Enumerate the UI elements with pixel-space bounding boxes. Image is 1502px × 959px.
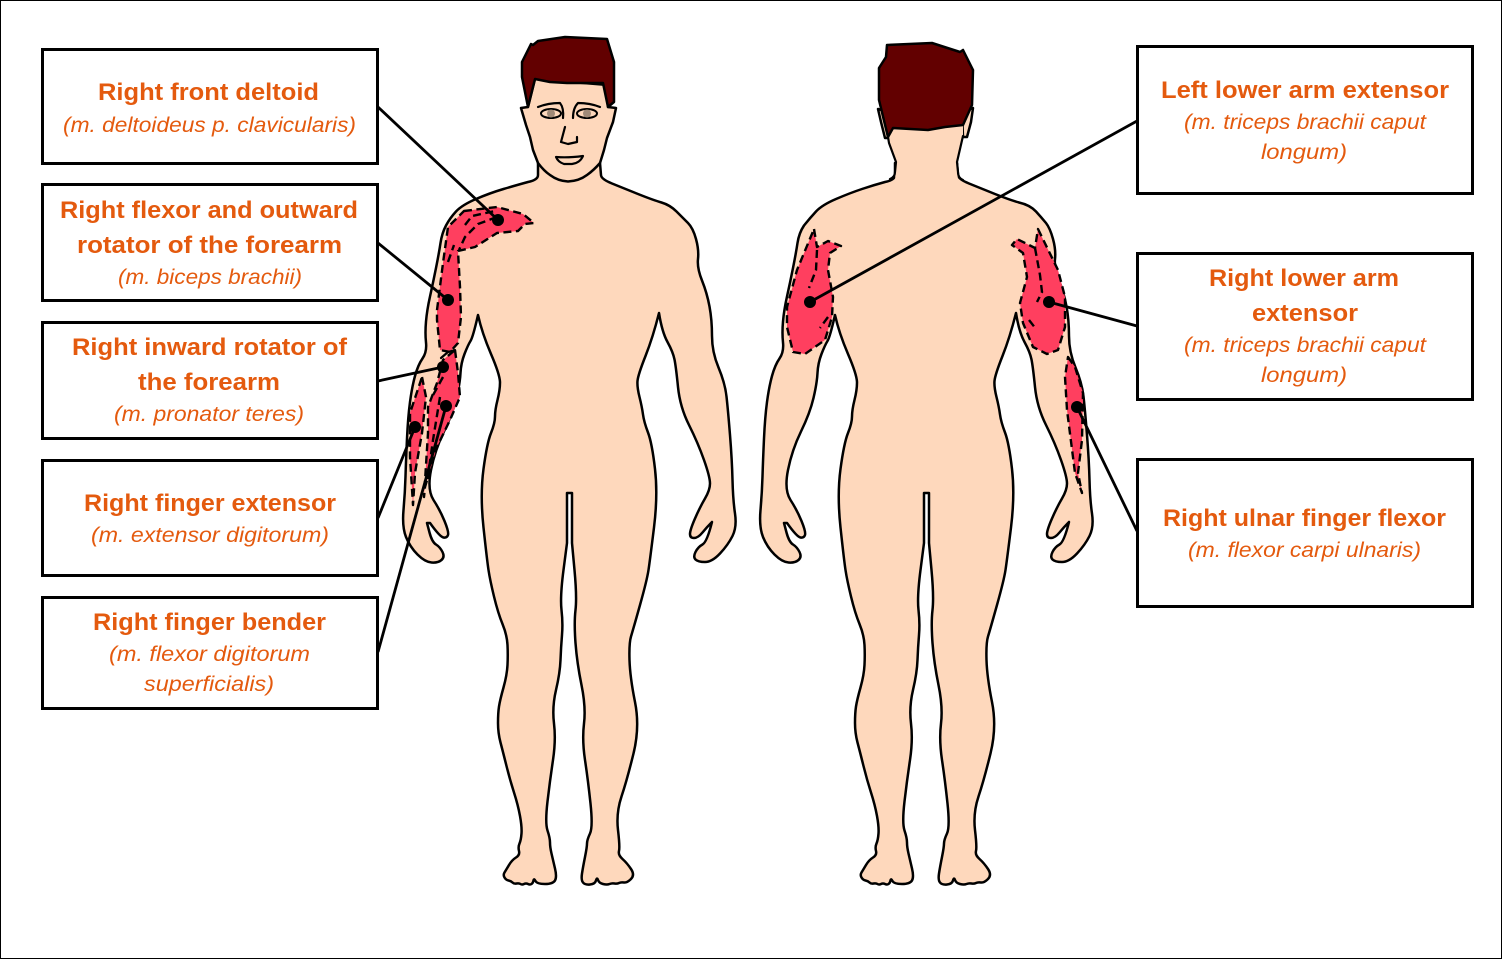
label: right ulnar finger flexor [1138,460,1472,606]
deltoid inner dashes [448,211,497,262]
leader: finger bender [378,406,446,652]
leader: biceps [378,243,448,300]
label: left lower arm extensor: Left lower arm extensor [1161,77,1449,104]
back muscle areas [787,229,1083,493]
back body figure [760,43,1093,885]
label: right finger bender: superficialis) [144,673,274,696]
label: right front deltoid [42,50,378,164]
label: right finger extensor [42,460,378,576]
label: right ulnar finger flexor: Right ulnar finger flexor [1163,505,1446,532]
back neck sides [888,136,963,180]
muscle: ulnar flexor [1065,357,1083,493]
label: right inward rotator [42,322,378,438]
label: right lower arm extensor: (m. triceps brachii caput [1184,334,1427,357]
eyes and brows [538,103,600,118]
label: right lower arm extensor [1138,254,1472,400]
label: right flexor and outward rotator: (m. biceps brachii) [118,266,302,289]
front body outline [403,163,736,885]
leader: finger extensor [378,427,415,518]
left triceps inner dashes [809,250,828,328]
label: right inward rotator: the forearm [138,369,280,396]
left ear [878,109,889,138]
face [521,79,616,182]
front muscle areas [410,207,534,505]
right ear [962,108,973,137]
label: right finger bender [42,598,378,708]
label: right finger bender: Right finger bender [93,609,326,636]
muscle: finger extensor [410,377,426,505]
leader: left triceps [810,121,1137,302]
leader lines [378,107,1137,652]
label: left lower arm extensor: (m. triceps brachii caput [1184,111,1427,134]
muscle: right triceps [1012,229,1065,354]
leader: right triceps [1049,302,1137,326]
muscle: pronator and finger flexor [424,350,460,497]
back body outline [760,163,1093,885]
label: right lower arm extensor: extensor [1252,300,1358,327]
back head [878,43,973,182]
label: right front deltoid: Right front deltoid [98,79,319,106]
right triceps inner dashes [1029,248,1042,329]
leader: pronator [378,367,443,381]
back neck [888,125,963,182]
leader: ulnar flexor [1077,407,1137,531]
label: right flexor and outward rotator [42,184,378,300]
front body figure [403,37,736,885]
label: right inward rotator: (m. pronator teres) [114,403,304,426]
front head [521,37,616,182]
label: right flexor and outward rotator: rotator of the forearm [77,232,342,259]
back hair [879,43,973,137]
label: right finger extensor: Right finger extensor [84,490,336,517]
forearm inner dashes [427,377,443,483]
muscle: deltoid and biceps [437,207,534,352]
mouth [556,156,583,164]
nose [561,127,577,144]
label: right inward rotator: Right inward rotator of [72,334,348,361]
label: right lower arm extensor: longum) [1261,364,1347,387]
label: left lower arm extensor: longum) [1261,141,1347,164]
marker dots [409,214,1083,433]
label: right front deltoid: (m. deltoideus p. clavicularis) [63,114,356,137]
label: left lower arm extensor [1138,46,1472,194]
label: right finger extensor: (m. extensor digitorum) [91,524,329,547]
leader: front deltoid [378,107,498,220]
label: right lower arm extensor: Right lower arm [1209,265,1399,292]
label: right flexor and outward rotator: Right flexor and outward [60,197,358,224]
label: right ulnar finger flexor: (m. flexor carpi ulnaris) [1188,539,1421,562]
elbow crease [441,350,455,358]
front hair [522,37,614,107]
muscle: left triceps [787,229,841,354]
label: right finger bender: (m. flexor digitorum [109,643,310,666]
